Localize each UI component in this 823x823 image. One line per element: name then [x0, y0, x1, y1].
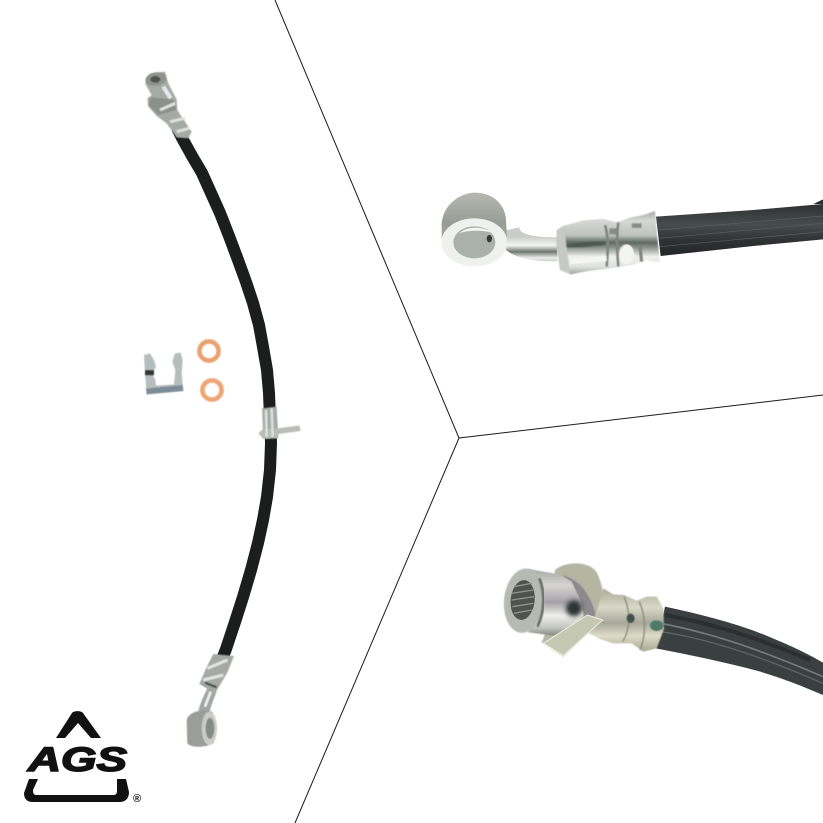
copper washer	[202, 380, 222, 400]
bottom banjo fitting	[187, 654, 234, 747]
fitting face	[501, 566, 547, 635]
top threaded fitting	[144, 71, 192, 138]
metal retaining clip	[144, 353, 183, 394]
banjo eye	[442, 193, 507, 243]
copper washer	[199, 341, 219, 361]
panel: full brake hose assembly	[144, 71, 301, 747]
hose	[656, 204, 823, 256]
registered trademark mark: ®	[133, 793, 141, 805]
AGS logo	[24, 711, 141, 805]
logo bottom bracket	[24, 779, 129, 802]
flange tab	[543, 615, 603, 656]
panel: banjo fitting close-up	[441, 193, 823, 274]
hose body	[177, 128, 271, 662]
panel: threaded fitting close-up	[501, 563, 823, 695]
divider lines between panels	[275, 0, 823, 823]
hose	[656, 607, 823, 695]
flange back	[542, 563, 605, 657]
threaded nose body	[528, 569, 583, 636]
logo wordmark: AGS	[27, 741, 127, 779]
panel: small parts	[144, 341, 222, 400]
logo top chevron	[56, 711, 101, 738]
crimped ferrule	[557, 211, 660, 274]
center bracket on hose	[258, 407, 301, 439]
crimped ferrule	[587, 588, 664, 652]
curved banjo tube	[507, 230, 557, 249]
